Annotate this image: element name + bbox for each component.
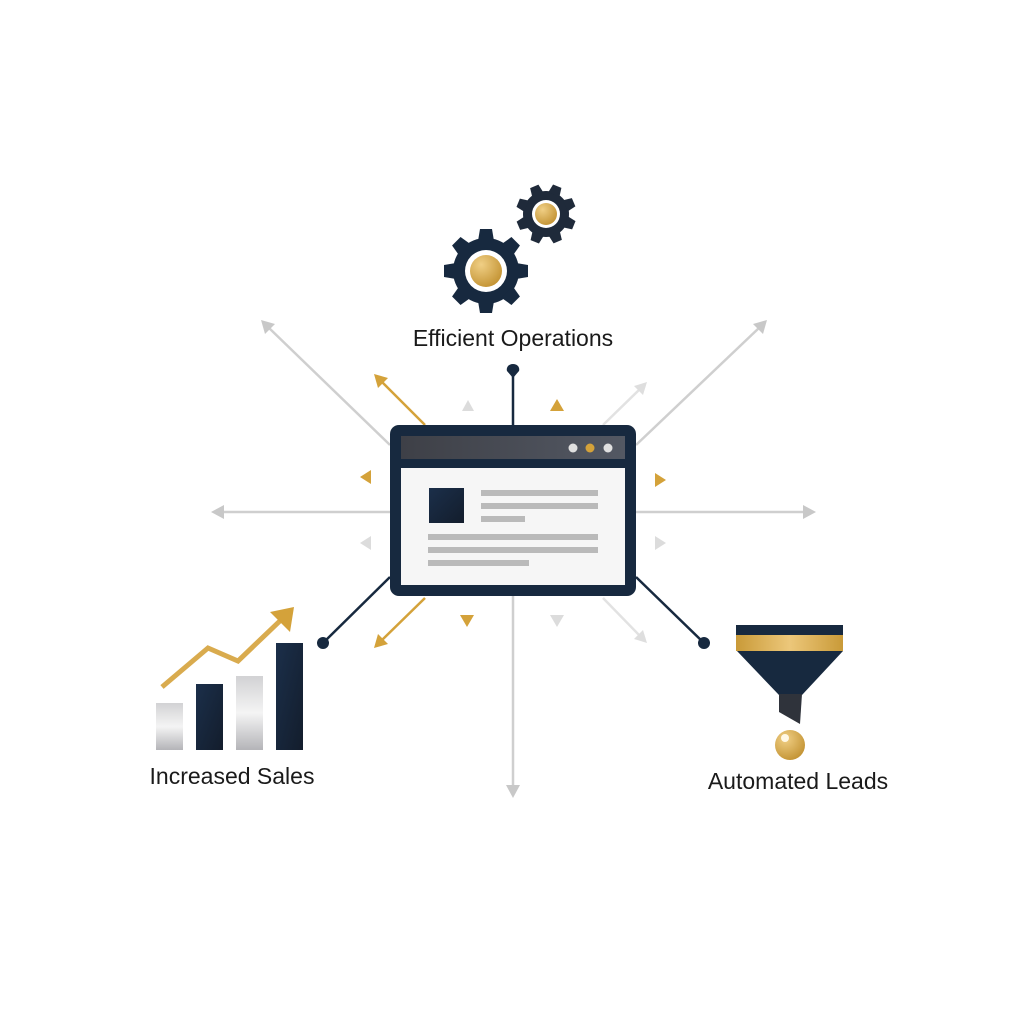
chart: increased sales [156,607,303,750]
label: Automated Leads: Automated Leads [708,768,888,794]
navy connectors [317,364,710,649]
big gear [444,229,528,313]
label: Efficient Operations: Efficient Operations [413,325,613,351]
browser window [390,425,636,596]
icon: gears [444,175,585,313]
icon: funnel [736,625,843,760]
gold arrows [374,374,425,648]
gray arrowheads [211,320,816,798]
radial gray arrows [220,327,806,788]
label: Increased Sales: Increased Sales [150,763,314,789]
small triangles [360,399,666,627]
small gear [507,175,585,253]
